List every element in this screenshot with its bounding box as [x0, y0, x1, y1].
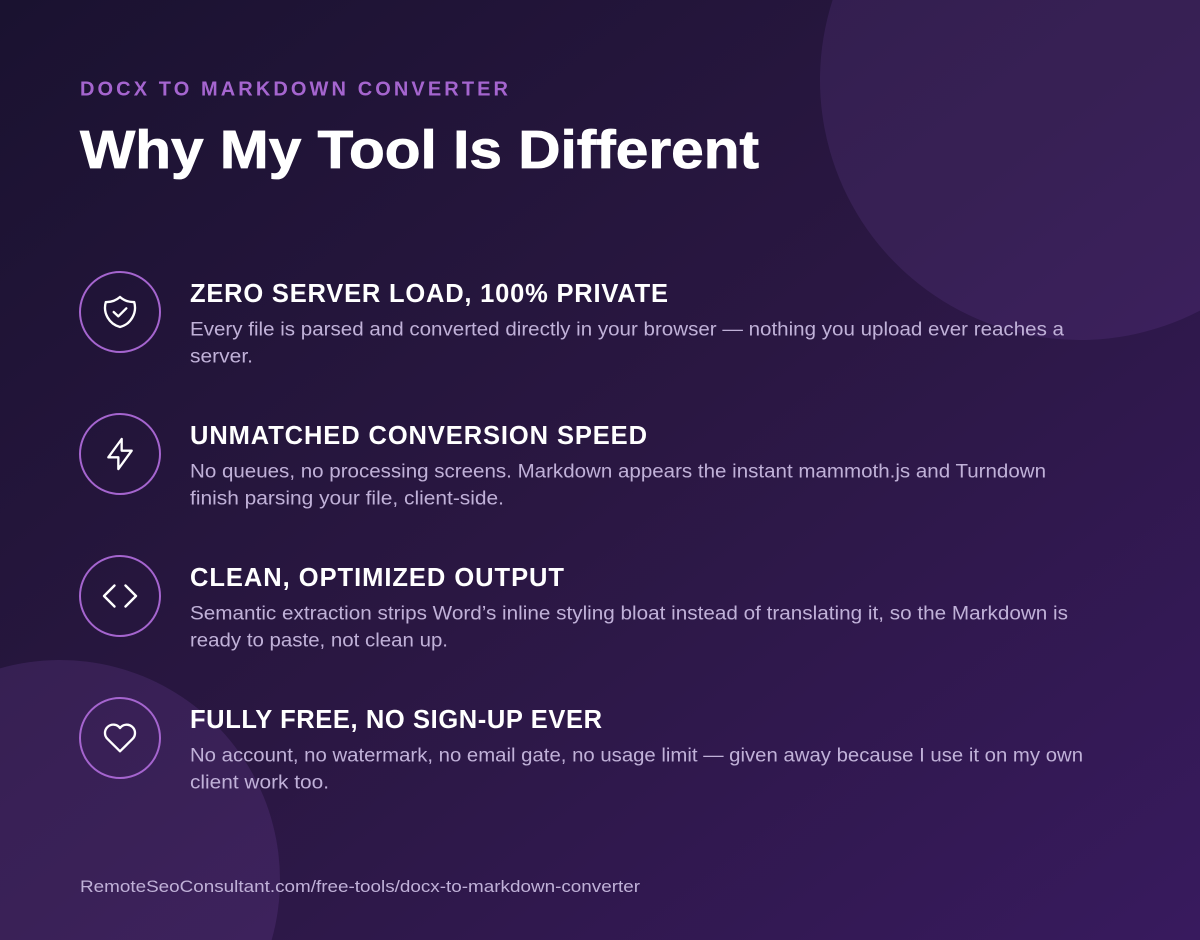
- title: Why My Tool Is Different: [80, 120, 759, 180]
- description: zero server load: server.: [190, 346, 253, 368]
- icon: heart: [80, 698, 160, 778]
- description: fully free: No account, no watermark, no email gate, no usage limit — given away because I use it on my own: [190, 746, 1083, 766]
- description: fully free: [190, 746, 1083, 794]
- icon: code brackets: [80, 556, 160, 636]
- decorative circle: bottom left: [0, 660, 280, 940]
- footer url: RemoteSeoConsultant.com/free-tools/docx-to-markdown-converter: [80, 877, 640, 896]
- description: clean output: Semantic extraction strips Word’s inline styling bloat instead of translating it, so the Markdown is: [190, 604, 1068, 624]
- description: conversion speed: finish parsing your file, client-side.: [190, 488, 504, 510]
- heading: fully free: FULLY FREE, NO SIGN-UP EVER: [190, 706, 602, 734]
- description: clean output: [190, 604, 1068, 652]
- item: conversion speed: [80, 414, 1046, 510]
- item: fully free: [80, 698, 1083, 794]
- decorative circle: top right: [820, 0, 1200, 340]
- description: zero server load: [190, 320, 1064, 368]
- item: clean output: [80, 556, 1068, 652]
- heading: zero server load: ZERO SERVER LOAD, 100% PRIVATE: [190, 280, 668, 308]
- item: zero server load: [80, 272, 1064, 368]
- description: clean output: ready to paste, not clean up.: [190, 630, 448, 652]
- description: conversion speed: No queues, no processing screens. Markdown appears the instant mammoth.js and Turndown: [190, 462, 1046, 482]
- eyebrow heading: DOCX TO MARKDOWN CONVERTER: [80, 78, 509, 100]
- description: fully free: client work too.: [190, 772, 329, 794]
- heading: clean output: CLEAN, OPTIMIZED OUTPUT: [190, 564, 564, 592]
- description: zero server load: Every file is parsed and converted directly in your browser — nothing you upload ever reaches a: [190, 320, 1064, 340]
- heading: conversion speed: UNMATCHED CONVERSION SPEED: [190, 422, 647, 450]
- icon: lightning bolt: [80, 414, 160, 494]
- description: conversion speed: [190, 462, 1046, 510]
- icon: shield check: [80, 272, 160, 352]
